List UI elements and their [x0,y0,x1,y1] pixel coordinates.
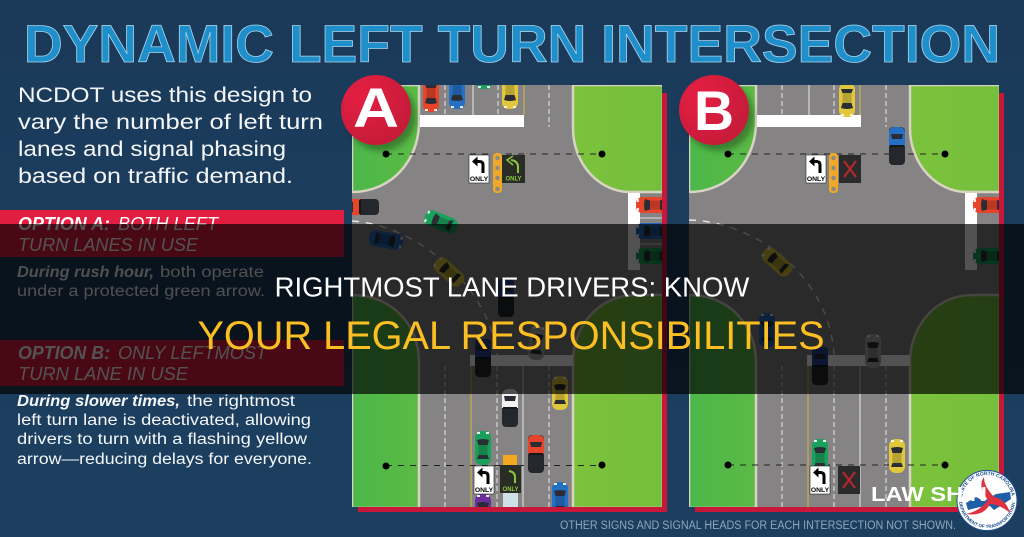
option B description: arrow—reducing delays for everyone. [17,451,312,468]
bottom only sign [474,466,494,494]
option B description: drivers to turn with a flashing yellow [17,431,308,448]
option B description: During slower times, [17,393,180,410]
option B description: left turn lane is deactivated, allowing [17,412,311,429]
badge B [679,75,754,151]
red backing [695,93,1004,512]
cars [423,85,439,112]
road surface [689,85,999,507]
icon: NCDOT logo [956,470,1018,531]
option B description: the rightmost [187,393,296,410]
cars [839,83,855,117]
span wires [728,154,945,465]
headline line 2: YOUR LEGAL RESPONSIBILITIES [197,314,825,358]
panel: option B [0,340,344,468]
intro text [18,84,323,188]
curved turn path [689,220,834,355]
watermark text: LAW SHIN [871,484,987,506]
option A heading: OPTION A: [18,214,110,234]
curved turn path [352,221,497,355]
span wires [386,154,602,466]
icon: NCDOT logo: STATE OF NORTH CAROLINA [962,472,1015,497]
option A heading: BOTH LEFT [118,214,220,234]
badge A: A [353,76,399,139]
option B heading: TURN LANE IN USE [18,364,189,384]
panel: option A [0,210,344,300]
signal bus [503,455,517,465]
option B heading [18,343,269,384]
option A description: both operate [160,264,264,281]
top signal head [829,153,838,193]
top green arrow signal: ONLY [505,176,522,182]
option A heading band [0,210,344,257]
striped vehicle [503,493,518,507]
option B heading: ONLY LEFTMOST [118,343,269,363]
lane markings [445,85,662,507]
intro text: NCDOT uses this design to [18,84,312,107]
green corners [689,85,1000,508]
option A description: under a protected green arrow. [17,283,265,300]
stop bars [757,115,977,366]
badge B: B [694,79,734,142]
intro text: lanes and signal phasing [18,138,286,161]
panel: intersection B [689,83,1007,512]
intro text: based on traffic demand. [18,165,293,188]
badge A [341,75,416,151]
top signal head [493,153,502,193]
lane markings [782,85,886,507]
headline line 1: RIGHTMOST LANE DRIVERS: KNOW [275,272,749,302]
option A heading [18,214,220,255]
red backing [358,93,667,512]
bottom green arrow signal: ONLY [502,487,519,493]
bottom green arrow signal [500,465,521,493]
icon: NCDOT logo: DEPARTMENT OF TRANSPORTATION [959,502,1015,528]
option B heading band [0,340,344,386]
top red X signal [839,155,861,183]
bottom only sign [810,466,830,494]
intro text: vary the number of left turn [18,111,323,134]
panel: intersection A [352,85,667,512]
bottom red X signal [838,466,860,494]
top green arrow signal [502,155,525,183]
option B description [17,393,312,468]
road surface [352,85,662,507]
top only sign [469,155,489,183]
option A heading: TURN LANES IN USE [18,235,199,255]
option A description: During rush hour, [17,264,154,281]
top only sign [806,155,826,183]
option B heading: OPTION B: [18,343,110,363]
dark overlay band [0,224,1024,394]
stop bars [420,115,640,366]
title: DYNAMIC LEFT TURN INTERSECTION [24,15,1000,74]
option A description [17,264,265,300]
green corners [352,85,663,508]
footnote: OTHER SIGNS AND SIGNAL HEADS FOR EACH INTERSECTION NOT SHOWN. [560,520,956,532]
